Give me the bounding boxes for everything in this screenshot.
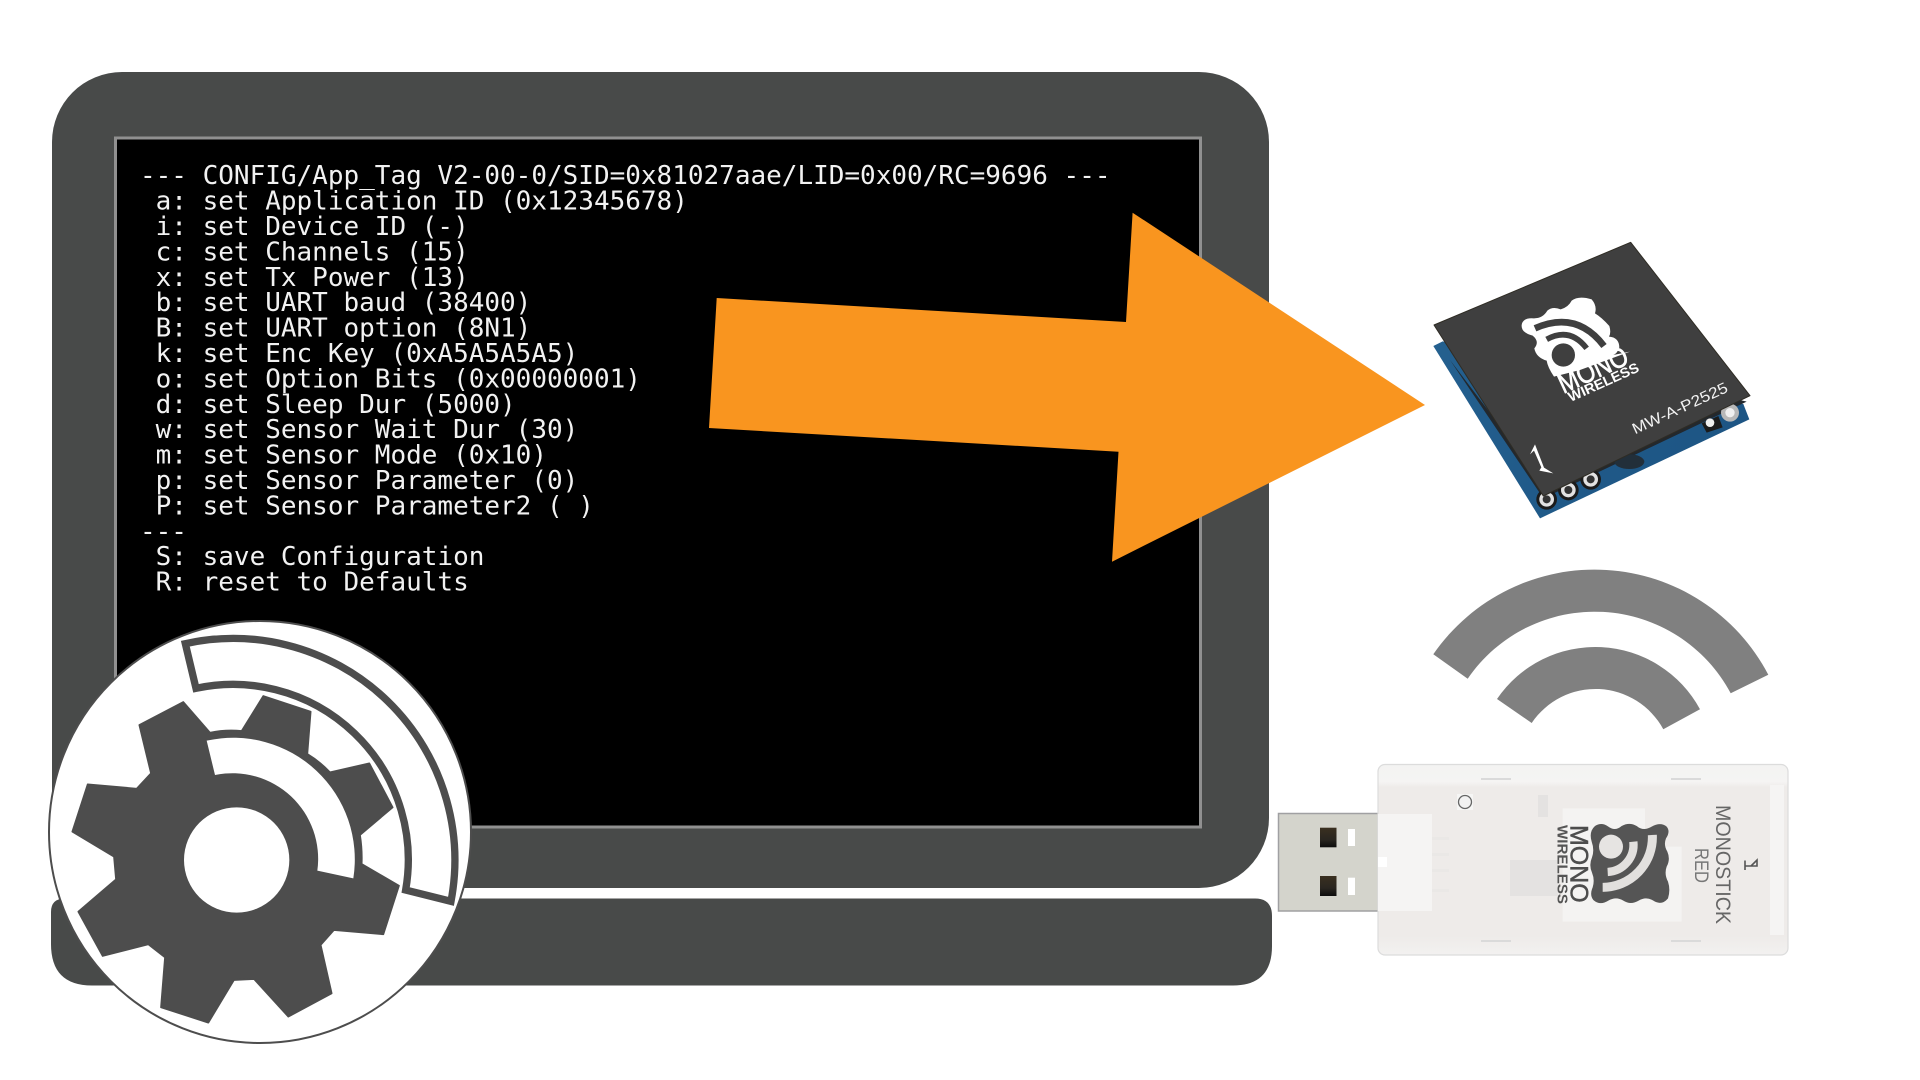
- outer outlined arc: [185, 638, 455, 901]
- stick body: [1378, 764, 1788, 955]
- terminal text: o: set Option Bits (0x00000001): [140, 364, 641, 394]
- circuit board: [1433, 341, 1749, 518]
- terminal text: --- CONFIG/App_Tag V2-00-0/SID=0x81027aae/LID=0x00/RC=9696 ---: [140, 161, 1111, 191]
- wireless signal arcs: [1433, 570, 1768, 729]
- terminal text: S: save Configuration: [140, 542, 484, 572]
- terminal text: R: reset to Defaults: [140, 568, 469, 598]
- terminal text: c: set Channels (15): [140, 237, 469, 267]
- inner white arc: [207, 738, 355, 878]
- terminal text: B: set UART option (8N1): [140, 314, 531, 344]
- Mono Wireless logo: WIRELESS: [1553, 825, 1569, 904]
- terminal text: w: set Sensor Wait Dur (30): [140, 415, 578, 445]
- terminal text: P: set Sensor Parameter2 ( ): [140, 491, 594, 521]
- top plate: [1434, 242, 1750, 496]
- gear badge: [49, 621, 471, 1043]
- USB plug: [1278, 814, 1380, 911]
- logo: WIRELESS: [1565, 359, 1641, 405]
- board underside shadow: [1450, 360, 1747, 498]
- terminal text: ---: [140, 517, 187, 547]
- gear: [72, 696, 399, 1023]
- outer arc: [1433, 570, 1768, 693]
- terminal text: x: set Tx Power (13): [140, 263, 469, 293]
- product variant: RED: [1690, 848, 1711, 883]
- terminal text: m: set Sensor Mode (0x10): [140, 441, 547, 471]
- laptop: [51, 72, 1272, 986]
- logo: MONO: [1553, 340, 1633, 399]
- terminal text: [140, 161, 1111, 598]
- terminal text: d: set Sleep Dur (5000): [140, 390, 516, 420]
- MONOSTICK RED USB stick: [1278, 764, 1788, 955]
- laptop base: [51, 898, 1272, 986]
- pin 1 mark: [1745, 860, 1757, 870]
- module MW-A-P2525: [1433, 242, 1750, 518]
- Mono Wireless logo: [1553, 808, 1682, 922]
- terminal text: a: set Application ID (0x12345678): [140, 186, 688, 216]
- inner arc: [1497, 647, 1700, 729]
- terminal text: b: set UART baud (38400): [140, 288, 531, 318]
- terminal text: k: set Enc Key (0xA5A5A5A5): [140, 339, 578, 369]
- terminal text: p: set Sensor Parameter (0): [140, 466, 578, 496]
- laptop body: [52, 72, 1269, 888]
- pin 1 mark: [1530, 444, 1553, 473]
- pads: [1536, 404, 1739, 510]
- LED window: [1457, 794, 1473, 810]
- badge circle: [49, 621, 471, 1043]
- logo: [1522, 298, 1641, 405]
- faint inner parts: [1378, 778, 1784, 942]
- model label: MW-A-P2525: [1630, 379, 1731, 438]
- product name: MONOSTICK: [1711, 805, 1735, 925]
- terminal screen: [116, 138, 1200, 827]
- terminal text: i: set Device ID (-): [140, 212, 469, 242]
- arrow: [709, 213, 1425, 562]
- Mono Wireless logo: MONO: [1565, 825, 1593, 903]
- gear hole: [184, 807, 289, 913]
